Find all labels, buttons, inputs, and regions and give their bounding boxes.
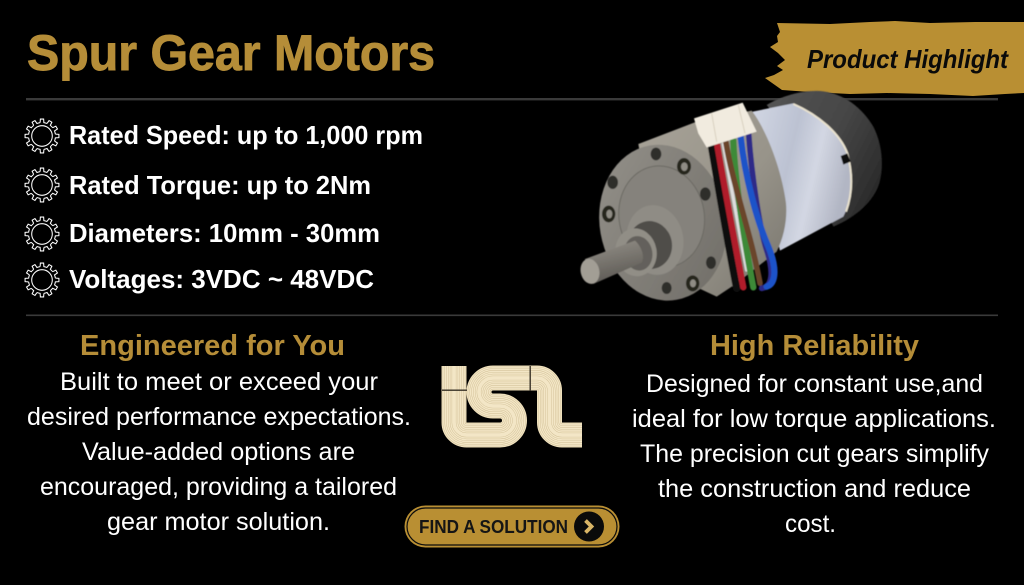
can rim (793, 104, 851, 212)
motor can (753, 103, 852, 251)
button label: FIND A SOLUTION (419, 517, 568, 537)
body line 1: Built to meet or exceed your (60, 368, 378, 396)
rated torque: Rated Torque: up to 2Nm (69, 170, 371, 200)
heading: Engineered for You (80, 330, 345, 362)
product highlight banner (765, 21, 1024, 96)
body line 2: ideal for low torque applications. (632, 405, 996, 433)
output shaft (585, 241, 643, 284)
gearbox barrel (638, 111, 786, 297)
rated speed: Rated Speed: up to 1,000 rpm (69, 120, 423, 150)
body line 5: gear motor solution. (107, 508, 330, 536)
icon: chevron circle (574, 512, 604, 542)
icon: gear 1 (25, 119, 59, 153)
icon: gear 4 (25, 263, 59, 297)
heading: High Reliability (710, 330, 919, 362)
banner label: Product Highlight (807, 44, 1009, 74)
output hub (621, 201, 689, 279)
diameters: Diameters: 10mm - 30mm (69, 218, 380, 248)
body line 4: encouraged, providing a tailored (40, 473, 397, 501)
motor end cap (767, 91, 882, 227)
body line 3: The precision cut gears simplify (640, 440, 989, 468)
logo: ISL (442, 366, 582, 435)
voltages: Voltages: 3VDC ~ 48VDC (69, 264, 374, 294)
body line 1: Designed for constant use,and (646, 370, 983, 398)
button: find a solution (404, 506, 620, 548)
right column: high reliability (632, 330, 996, 538)
left column: engineered for you (27, 330, 411, 536)
body line 5: cost. (785, 510, 836, 538)
body line 2: desired performance expectations. (27, 403, 411, 431)
icon: gear 3 (25, 217, 59, 251)
body line 4: the construction and reduce (658, 475, 971, 503)
holes and screws (602, 148, 716, 294)
cap notch (841, 153, 851, 165)
wire connector (694, 103, 757, 147)
wires (712, 134, 774, 288)
motor product illustration (578, 91, 882, 311)
icon: gear 2 (25, 168, 59, 202)
gearbox front face (587, 135, 739, 311)
specification list (25, 119, 423, 297)
inner face ring (611, 159, 713, 274)
body line 3: Value-added options are (82, 438, 355, 466)
title: Spur Gear Motors (27, 25, 435, 81)
